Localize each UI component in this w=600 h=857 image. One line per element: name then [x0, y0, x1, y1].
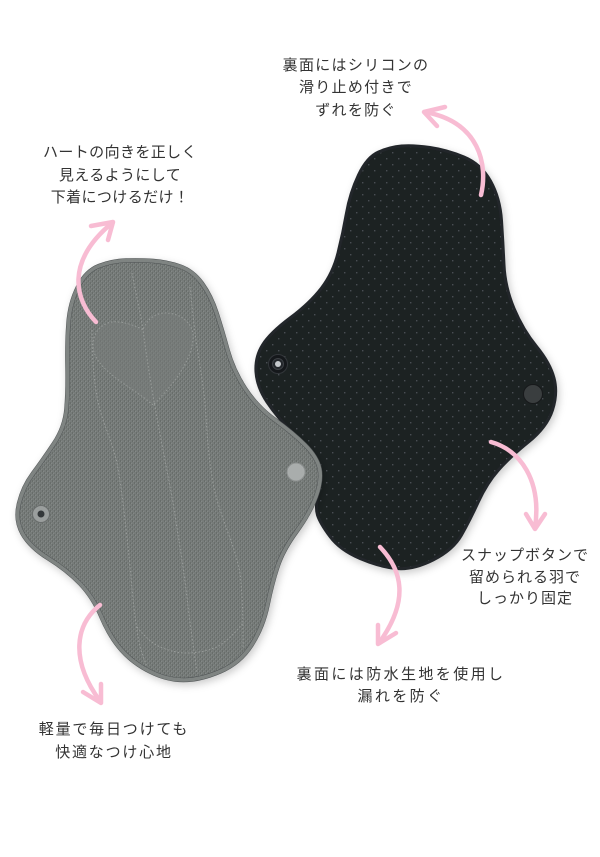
- text: silicone non-slip: [283, 57, 429, 119]
- grey pad: front side: [18, 260, 320, 680]
- arrow: heart callout: [78, 222, 113, 322]
- text: heart orientation: [43, 144, 197, 206]
- text: heart orientation: 見えるようにして: [59, 167, 181, 184]
- text: lightweight comfort: 軽量で毎日つけても: [39, 721, 189, 738]
- text: waterproof: [297, 666, 505, 705]
- arrow: silicone callout: [424, 107, 483, 195]
- icon: snap socket on black pad: [268, 354, 288, 374]
- text: waterproof: 裏面には防水生地を使用し: [297, 666, 505, 683]
- text: snap wings: スナップボタンで: [461, 547, 589, 564]
- icon: snap button on black pad: [524, 384, 542, 404]
- text: heart orientation: 下着につけるだけ！: [51, 189, 189, 206]
- black pad: back side: [256, 146, 556, 569]
- text: silicone non-slip: 裏面にはシリコンの: [283, 57, 429, 74]
- text: silicone non-slip: ずれを防ぐ: [315, 102, 397, 119]
- arrow: comfort callout: [79, 605, 101, 703]
- stitch lines: [92, 273, 243, 673]
- heart stitching: [93, 313, 193, 405]
- text: silicone non-slip: 滑り止め付きで: [299, 79, 413, 96]
- text: lightweight comfort: 快適なつけ心地: [55, 744, 173, 761]
- icon: snap button on grey pad: [287, 463, 305, 481]
- arrow: waterproof callout: [378, 547, 399, 644]
- icon: snap socket on grey pad: [32, 506, 50, 522]
- text: snap wings: [461, 547, 589, 607]
- arrow: snap callout: [491, 442, 545, 529]
- text: lightweight comfort: [39, 721, 189, 761]
- text: snap wings: 留められる羽で: [469, 569, 581, 586]
- text: snap wings: しっかり固定: [477, 590, 573, 607]
- text: waterproof: 漏れを防ぐ: [357, 688, 445, 705]
- text: heart orientation: ハートの向きを正しく: [43, 144, 197, 161]
